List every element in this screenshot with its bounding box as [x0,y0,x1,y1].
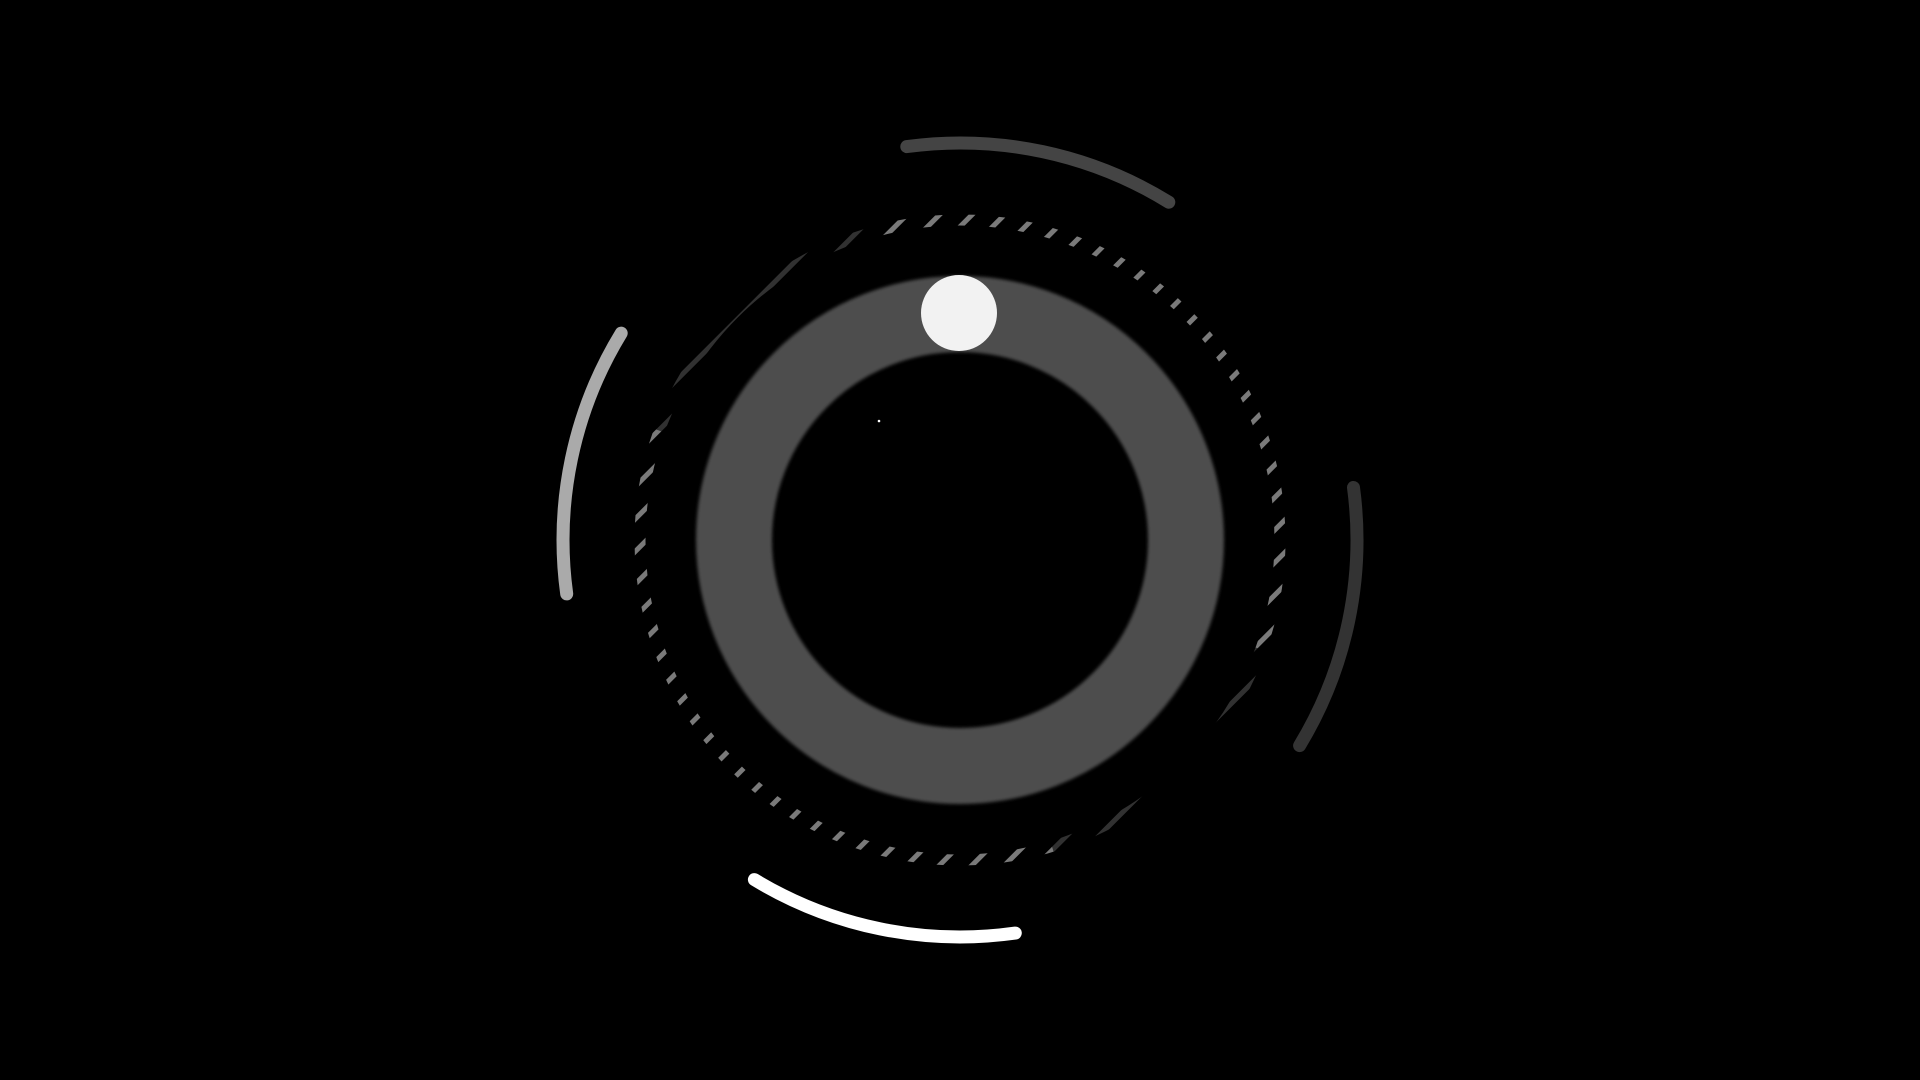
outer arc: left [563,333,621,594]
dashed ring [640,220,1280,860]
white indicator dot [921,275,997,351]
outer arc: bottom [754,880,1015,937]
gray progress ring [734,314,1186,766]
outer arc: top [907,143,1169,202]
outer arc: right [1300,488,1357,746]
tiny center dot [878,420,880,422]
